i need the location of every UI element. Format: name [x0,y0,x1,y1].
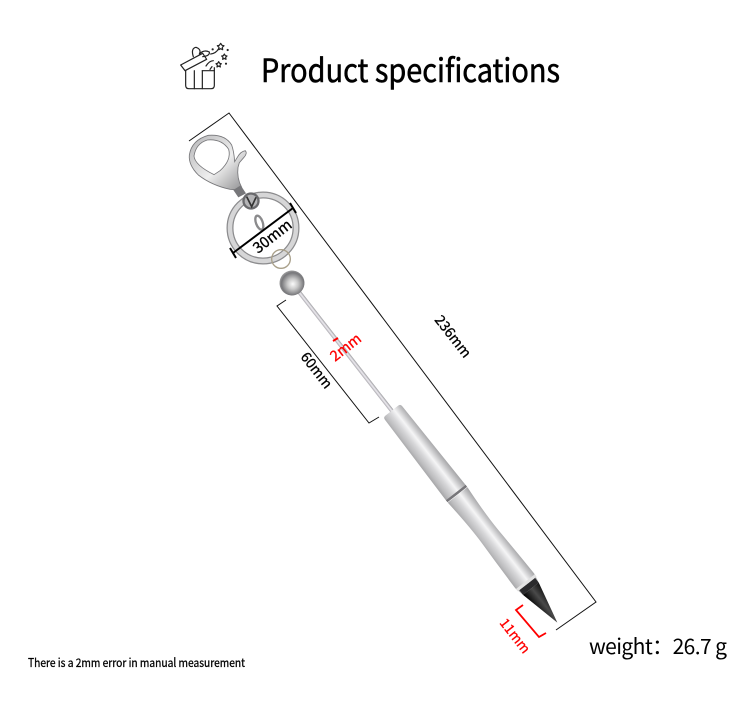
dimension: 2mm rod diameter: 2mm [325,328,366,366]
pen with keychain [189,135,567,630]
key ring [230,195,296,261]
dimension: 30mm ring diameter: 30mm [248,214,296,258]
lobster clasp [189,135,290,268]
ferrule band [446,485,467,502]
footnote: There is a 2mm error in manual measurement [28,654,245,671]
swivel link [233,185,246,197]
barrel lower [448,487,541,596]
dimension: 60mm rod length: 60mm [296,348,337,393]
barrel upper [382,403,466,501]
weight label: weight：26.7 g [589,631,727,661]
dimension line: 236mm overall length [189,113,596,630]
title: Product specifications [261,46,560,92]
jump ring [272,250,290,268]
rod [295,288,395,414]
dimension: 30mm ring diameter [230,203,296,258]
dimension: 60mm rod length [277,300,379,423]
black tip [523,583,565,629]
dimension: 11mm tip length: 11mm [496,613,536,657]
bead [274,265,310,301]
dimension: 11mm tip length [496,605,546,657]
collar [519,578,539,595]
pen rotated along axis [274,265,567,630]
label: 236mm: 236mm [430,311,476,362]
icon: open gift box with stars [181,43,228,89]
small link [254,215,265,231]
